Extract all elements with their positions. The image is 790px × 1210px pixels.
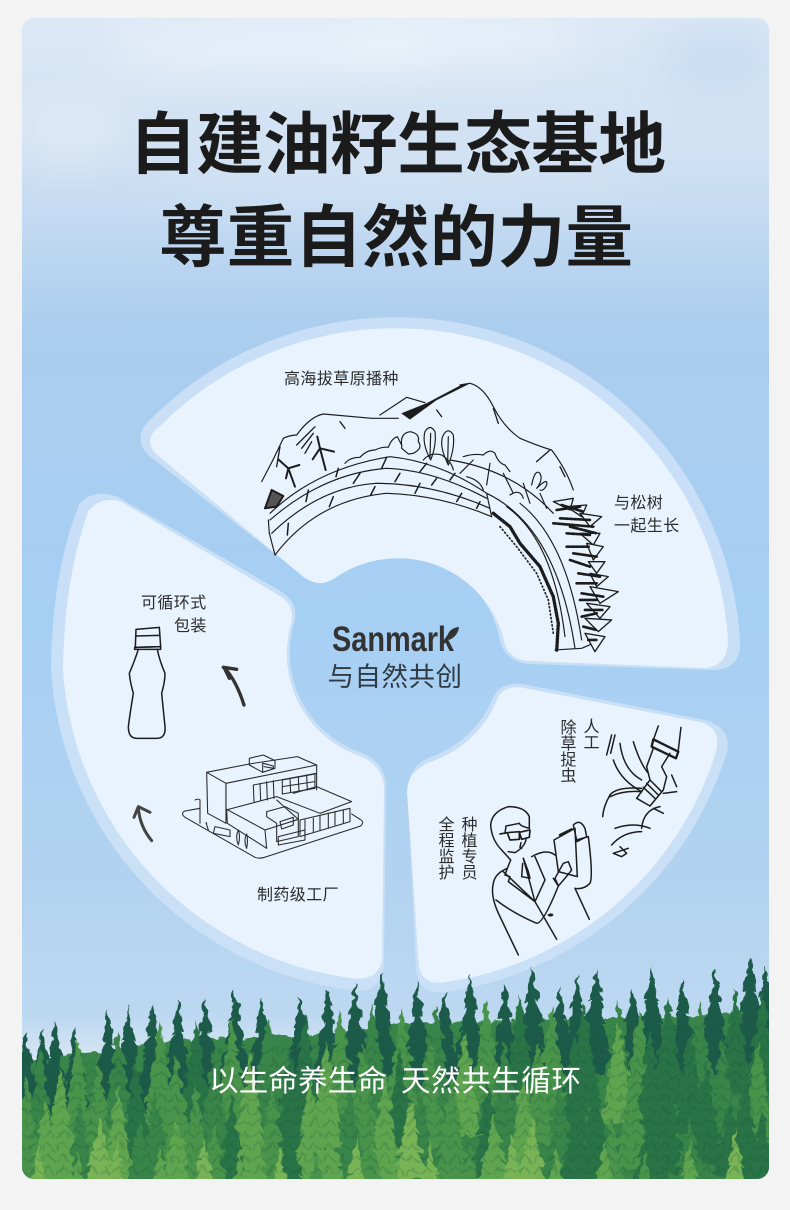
panels: top, left and right segments xyxy=(63,328,728,983)
label: grow with pines xyxy=(614,494,680,535)
label: manual weeding xyxy=(558,718,600,783)
centre slogan: 与自然共创 xyxy=(328,662,462,692)
illustration: bottle xyxy=(128,627,165,738)
label: planting specialists: 全程监护 xyxy=(436,816,454,881)
label: planting specialists xyxy=(436,816,478,881)
forest xyxy=(22,958,769,1179)
bottom slogan: 天然共生循环 xyxy=(401,1065,581,1098)
label: recyclable packaging: 包装 xyxy=(174,617,207,635)
label: planting specialists: 种植专员 xyxy=(458,816,478,880)
arrow: up to factory xyxy=(134,807,152,841)
label: manual weeding: 人工 xyxy=(580,718,600,750)
label: grow with pines: 与松树 xyxy=(614,494,663,512)
label: grow with pines: 一起生长 xyxy=(614,517,680,535)
title: 自建油籽生态基地 xyxy=(129,108,666,183)
bottom slogan xyxy=(209,1065,581,1098)
panel halo: three ring segments xyxy=(51,317,740,993)
label: pharma grade factory: 制药级工厂 xyxy=(257,886,339,904)
bottom slogan: 以生命养生命 xyxy=(209,1065,387,1098)
label: recyclable packaging: 可循环式 xyxy=(141,594,207,612)
title line 2: 尊重自然的力量 xyxy=(159,201,633,276)
label: recyclable packaging xyxy=(141,594,207,635)
illustration: specialist xyxy=(491,807,591,955)
illustration: factory xyxy=(182,755,363,858)
label: high altitude sowing: 高海拔草原播种 xyxy=(284,370,399,388)
logo: Sanmark: Sanmark xyxy=(332,620,454,659)
illustration: terraced mountain xyxy=(262,383,618,652)
label: manual weeding: 除草捉虫 xyxy=(558,719,576,783)
title xyxy=(129,108,666,276)
illustration: hand weeding xyxy=(603,726,681,857)
arrow: up to bottle xyxy=(223,667,244,705)
icon: leaf on logo xyxy=(447,627,459,640)
